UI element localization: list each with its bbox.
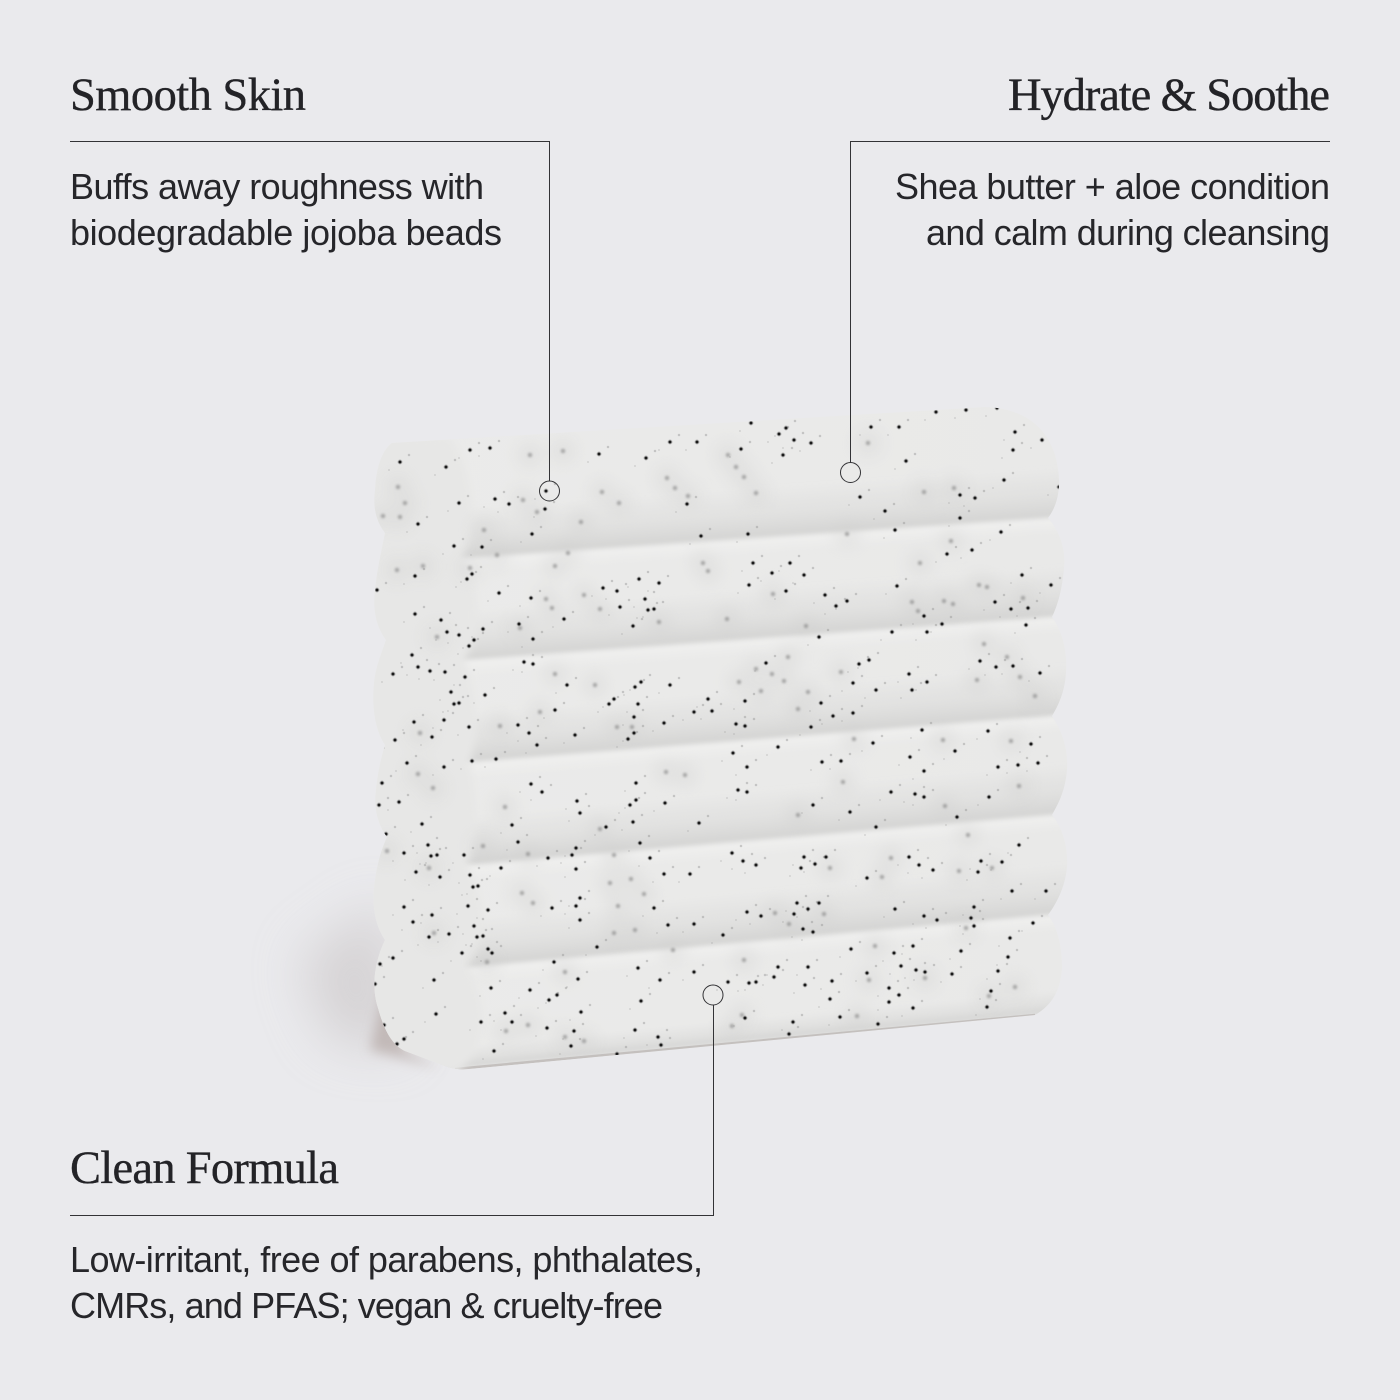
leader line and marker bbox=[70, 142, 560, 501]
callout: hydrate and soothe bbox=[840, 70, 1330, 482]
heading: hydrate and soothe: Hydrate & Soothe bbox=[1008, 70, 1330, 121]
leader line and marker bbox=[840, 142, 1330, 482]
body text: Shea butter + aloe condition bbox=[895, 166, 1330, 207]
dark halo speckles bbox=[375, 408, 1059, 1054]
body text bbox=[895, 166, 1330, 253]
body text: biodegradable jojoba beads bbox=[70, 212, 502, 253]
body text: Buffs away roughness with bbox=[70, 166, 484, 207]
ribbed soap body bbox=[374, 408, 1066, 1070]
grey speckles bbox=[383, 443, 1035, 1041]
body text: CMRs, and PFAS; vegan & cruelty-free bbox=[70, 1285, 663, 1326]
body text: Low-irritant, free of parabens, phthalates, bbox=[70, 1239, 703, 1280]
faint speckle layer bbox=[384, 401, 1068, 1047]
leader line and marker bbox=[70, 985, 723, 1216]
rib shading bbox=[464, 493, 1062, 1066]
callout: clean formula bbox=[70, 985, 723, 1326]
body text bbox=[70, 1239, 703, 1326]
dark speckles bbox=[375, 408, 1059, 1054]
heading: clean formula: Clean Formula bbox=[70, 1143, 339, 1194]
callout: smooth skin bbox=[70, 70, 560, 501]
fine speckle layer bbox=[364, 416, 1048, 1062]
end face of soap bbox=[382, 540, 472, 1070]
mottling bbox=[563, 556, 564, 557]
heading: smooth skin: Smooth Skin bbox=[70, 70, 306, 121]
body text: and calm during cleansing bbox=[926, 212, 1330, 253]
soap bar bbox=[374, 408, 1066, 1070]
soap cast shadow bbox=[300, 900, 440, 1068]
bottom edge bbox=[455, 1015, 1035, 1069]
body text bbox=[70, 166, 502, 253]
